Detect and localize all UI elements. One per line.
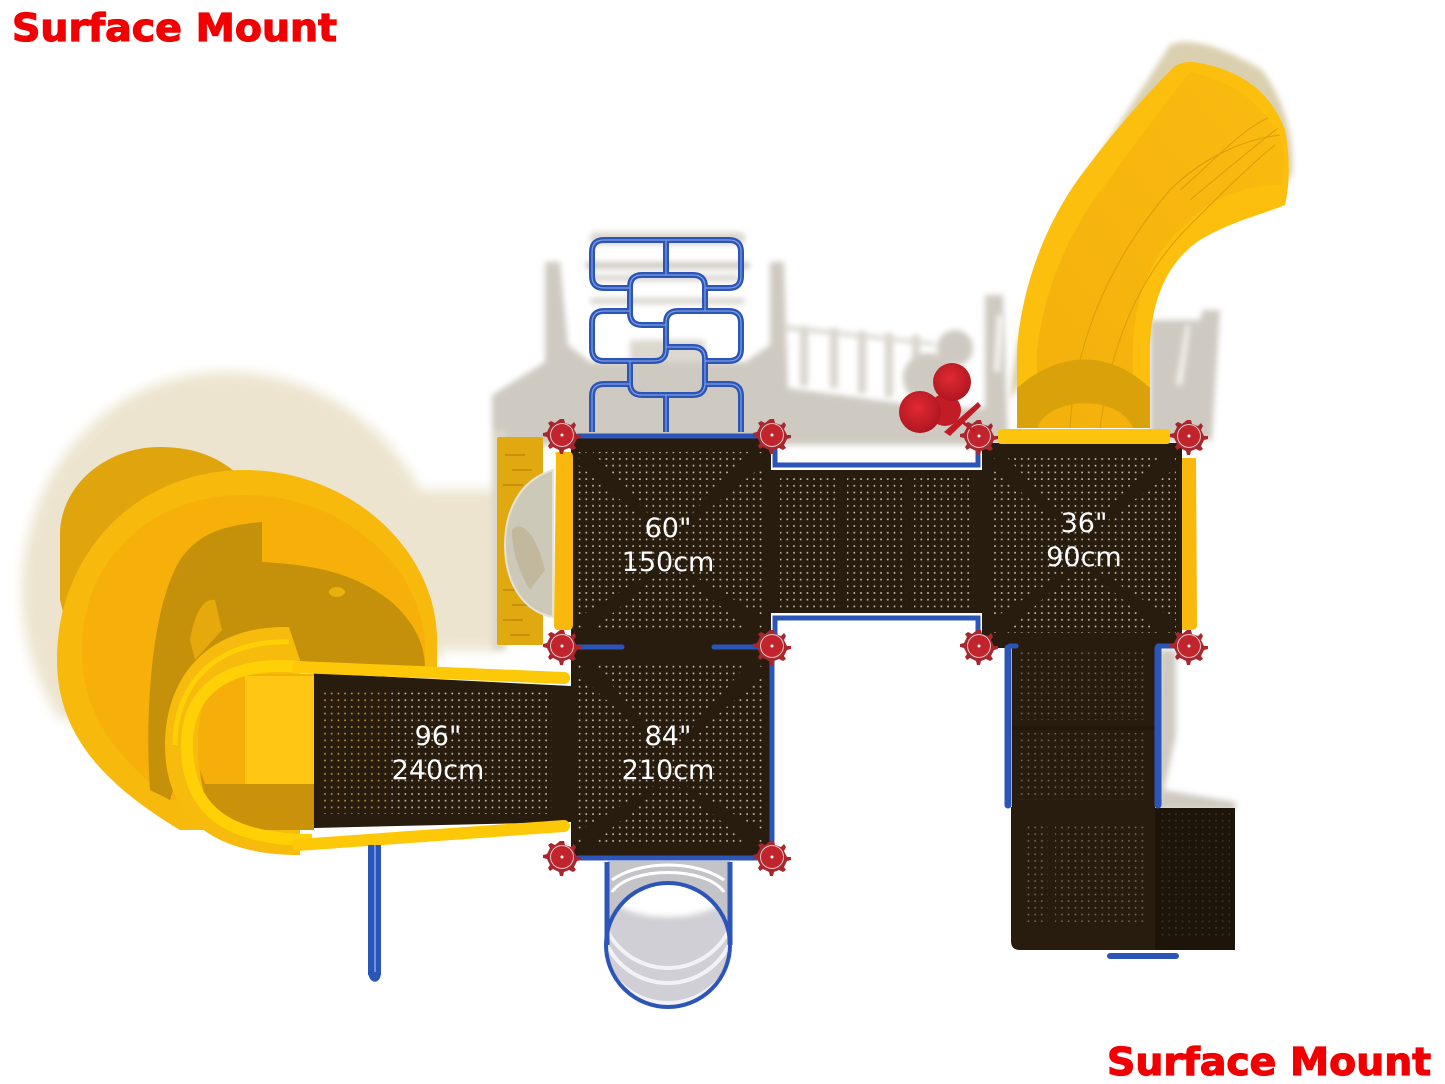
size label: 96 inch: 96" [415,721,461,752]
exit outer band [165,627,300,855]
shadow: stair rail and side step [1155,650,1236,810]
spiral outer rim [57,470,437,830]
title top left: Surface Mount [12,6,337,50]
size label: 60 inch: 150cm [622,547,714,578]
red spring rider [899,363,981,436]
size label: 60 inch: 60" [645,513,691,544]
deck 36 inch [982,443,1182,648]
size label: 36 inch: 36" [1061,508,1107,539]
ramp top rail [298,667,564,678]
exit chute [198,674,314,830]
slide bottom shadow band [1017,360,1150,428]
connector deck [771,470,982,613]
tunnel blue hoop [607,862,730,945]
tunnel [604,861,732,1009]
shadow: spiral slide cast on the ground [22,372,500,720]
shadow: top right slide on the ground [1010,42,1293,400]
blue frame rails [578,436,1180,956]
yellow climbing block [497,437,553,645]
slide top lip [998,429,1170,444]
spiral shadow inside bowl [148,522,425,800]
ramp bottom rail [298,826,564,845]
deck 84 inch [571,648,771,856]
spiral tube slide, left [57,447,437,830]
size label: 84 inch: 84" [645,721,691,752]
size label: 84 inch: 210cm [622,755,714,786]
curved slide, top right [998,62,1289,444]
main structure decks [571,438,1235,950]
yellow side panels [554,452,1197,630]
ramp deck [314,673,571,828]
net climber [592,240,741,432]
slide bed [1037,72,1284,428]
spiral inner bowl [82,495,425,800]
size label: 96 inch: 240cm [392,755,484,786]
shadow: light gaps beside the slide posts [994,315,1190,385]
tunnel ribs [608,861,730,921]
slide exit and ramp [165,627,571,855]
shadow: structure cast on the ground [492,232,1220,650]
stair deck [1012,645,1155,810]
deck 60 inch [571,438,771,650]
clear bubble dome [505,470,553,617]
post hubs [543,419,1208,876]
blue support pole [368,845,381,982]
side step [1155,808,1235,950]
title bottom right: Surface Mount [1107,1040,1431,1084]
exit inner rail [187,666,312,840]
size label: 36 inch: 90cm [1046,542,1122,573]
slide outer body [1017,62,1289,428]
spiral back section [60,447,235,640]
spiral light gap [190,600,222,660]
lower landing [1011,807,1155,950]
